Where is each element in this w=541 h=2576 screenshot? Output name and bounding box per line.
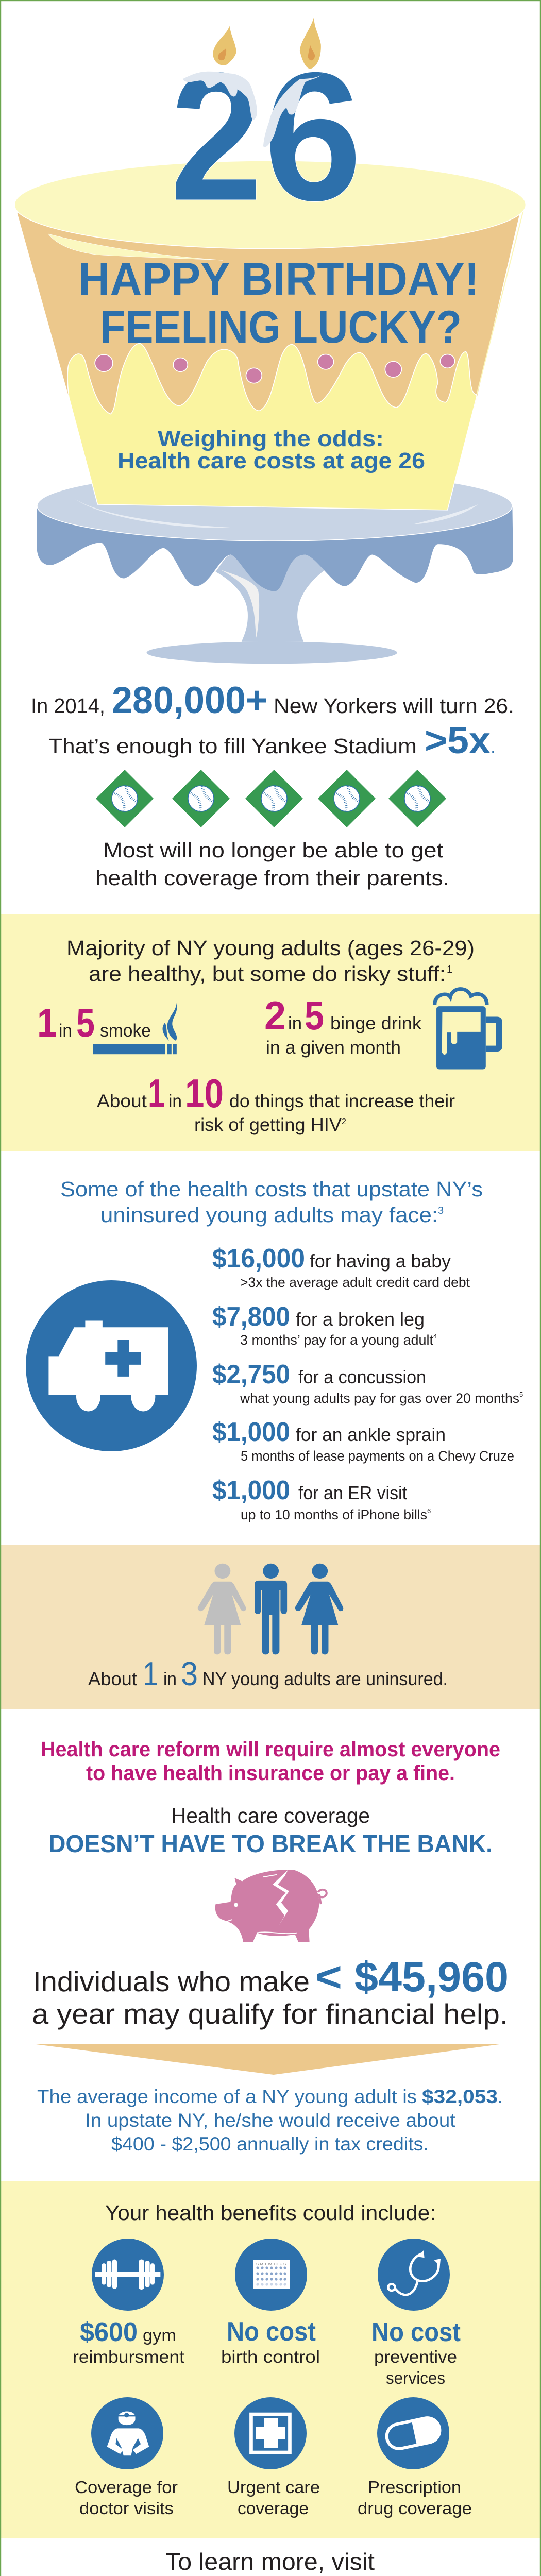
stat: 1 in 3 uninsured: 3 — [181, 1655, 198, 1692]
text: 280,000 New Yorkers — [31, 680, 514, 721]
icing — [67, 344, 477, 510]
benefit: doctor visits: doctor visits — [79, 2499, 174, 2518]
heading: risky stuff: Majority of NY young adults (ages 26-29) — [66, 936, 475, 960]
heading: health costs: 3 — [438, 1205, 444, 1216]
cake body — [17, 213, 519, 510]
title — [78, 253, 479, 352]
benefit: doctor visits — [75, 2478, 178, 2518]
cost: broken leg: 4 — [433, 1332, 437, 1340]
benefit: prescription drugs: Prescription — [368, 2478, 461, 2497]
heading: risky stuff: are healthy, but some do risky stuff: — [89, 962, 446, 986]
heading: health costs: uninsured young adults may face: — [100, 1203, 438, 1227]
cost: baby: for having a baby — [310, 1250, 451, 1272]
stat: 1 in 3 uninsured: in — [163, 1668, 177, 1689]
heading: risky stuff: 1 — [447, 964, 452, 975]
icon: stethoscope — [378, 2239, 450, 2311]
icon: urgent care cross — [234, 2397, 307, 2469]
stat: 2 in 5 binge drink: in — [288, 1013, 302, 1033]
cost: ankle sprain — [212, 1417, 514, 1464]
section: health costs — [26, 1177, 523, 1522]
icon: doctor — [91, 2397, 163, 2469]
stat: 2 in 5 binge drink: binge drink — [330, 1013, 422, 1033]
benefit: urgent care: Urgent care — [227, 2478, 320, 2497]
text: fill Yankee Stadium: . — [491, 734, 496, 758]
text: fill Yankee Stadium: That’s enough to fill Yankee Stadium — [48, 734, 417, 758]
callout: reform requirement: to have health insurance or pay a fine. — [86, 1761, 455, 1785]
text: fill Yankee Stadium — [48, 720, 496, 761]
icon: calendar: S M T W TH F S — [256, 2262, 286, 2266]
text: fill Yankee Stadium: >5x — [425, 720, 491, 761]
stat: 1 in 10 HIV risk: 1 — [148, 1071, 165, 1116]
callout: reform requirement — [41, 1737, 500, 1785]
benefit: birth control: No cost — [227, 2317, 316, 2347]
panel: risky behaviors — [0, 914, 541, 1151]
title: FEELING LUCKY? — [100, 301, 462, 352]
icon: broken piggy bank — [215, 1870, 327, 1942]
cake top — [14, 161, 526, 249]
heading: break the bank — [48, 1804, 493, 1858]
icon: pill — [377, 2397, 449, 2469]
heading: break the bank: Health care coverage — [171, 1804, 370, 1827]
section: health care reform — [32, 1737, 509, 2155]
stat: 1 in 3 uninsured — [88, 1655, 448, 1692]
panel: health benefits — [0, 2181, 541, 2538]
text: average income and tax credits — [37, 2086, 502, 2155]
benefit: preventive services: services — [386, 2368, 445, 2387]
arrow: down — [36, 2044, 499, 2075]
stat: 1 in 10 HIV risk: 10 — [185, 1071, 224, 1116]
cost: ER visit: $1,000 — [212, 1476, 290, 1505]
panel: uninsured — [0, 1545, 541, 1709]
cost: baby: $16,000 — [212, 1244, 305, 1274]
benefit: gym: gym — [143, 2326, 176, 2345]
benefit: gym: $600 — [80, 2317, 138, 2347]
icon: beer mug — [435, 989, 502, 1070]
cost: concussion: what young adults pay for gas over 20 months — [240, 1391, 519, 1406]
text: average income and tax credits: $400 - $2,500 annually in tax credits. — [111, 2133, 429, 2155]
text: income threshold: a year may qualify for financial help. — [32, 1998, 508, 2030]
cake decoration dots — [95, 354, 455, 383]
text: income threshold — [32, 1954, 509, 2030]
number 26 candles — [170, 35, 362, 239]
benefit: prescription drugs: drug coverage — [358, 2499, 472, 2518]
icon: ambulance — [26, 1280, 197, 1451]
stat: 1 in 3 uninsured: About — [88, 1668, 137, 1689]
benefit: preventive services: No cost — [371, 2317, 461, 2347]
cost: broken leg: for a broken leg — [296, 1309, 425, 1330]
stat: 1 in 5 smoke — [37, 1000, 151, 1045]
stat: 1 in 5 smoke: in — [59, 1021, 72, 1041]
stat: 1 in 5 smoke: 1 — [37, 1000, 57, 1045]
cost: baby — [212, 1244, 470, 1290]
cake stand — [37, 505, 513, 664]
heading: health costs — [60, 1177, 483, 1227]
stat: 1 in 5 smoke: smoke — [100, 1021, 151, 1041]
section: Yankee Stadium statistic — [31, 680, 514, 890]
stat: 1 in 10 HIV risk: 2 — [342, 1117, 346, 1126]
stat: 1 in 3 uninsured: NY young adults are uninsured. — [202, 1668, 448, 1689]
icons: baseball diamonds — [96, 770, 446, 827]
text: average income and tax credits: $32,053 — [422, 2086, 498, 2107]
stat: 1 in 10 HIV risk: About — [97, 1091, 147, 1111]
candle flames — [213, 17, 321, 69]
subtitle: Health care costs at age 26 — [117, 448, 425, 473]
cost: broken leg: 3 months’ pay for a young adult — [240, 1332, 433, 1348]
text: average income and tax credits: The average income of a NY young adult is — [37, 2086, 417, 2107]
cost: concussion: 5 — [519, 1391, 523, 1398]
text: no longer covered by parents: health coverage from their parents. — [95, 866, 449, 890]
cost: baby: >3x the average adult credit card debt — [240, 1275, 470, 1290]
benefit: doctor visits: Coverage for — [75, 2478, 178, 2497]
benefit: urgent care — [227, 2478, 320, 2518]
stat: 1 in 10 HIV risk: risk of getting HIV — [194, 1115, 342, 1135]
text: 280,000 New Yorkers: 280,000+ — [112, 680, 267, 721]
benefit: prescription drugs — [358, 2478, 472, 2518]
heading: benefits: Your health benefits could include: — [105, 2201, 436, 2225]
cost: broken leg — [212, 1302, 437, 1348]
stat: 2 in 5 binge drink: 5 — [305, 993, 324, 1038]
benefit: preventive services — [371, 2317, 461, 2387]
text: income threshold: $45,960 — [354, 1954, 509, 2001]
cost: broken leg: $7,800 — [212, 1302, 290, 1332]
subtitle — [117, 426, 425, 473]
cost: ankle sprain: 5 months of lease payments on a Chevy Cruze — [241, 1448, 514, 1464]
benefit: birth control: birth control — [221, 2347, 320, 2366]
icon: calendar — [235, 2239, 307, 2311]
stat: 1 in 3 uninsured: 1 — [143, 1655, 158, 1692]
text: 280,000 New Yorkers: New Yorkers will turn 26. — [274, 694, 514, 718]
heading: health costs: Some of the health costs that upstate NY’s — [60, 1177, 483, 1201]
cost: ankle sprain: $1,000 — [212, 1417, 290, 1447]
text: income threshold: < — [315, 1954, 342, 2001]
stat: 2 in 5 binge drink: 2 — [264, 993, 286, 1038]
subtitle: Weighing the odds: — [158, 426, 384, 451]
benefit: gym: reimbursment — [73, 2347, 184, 2366]
benefit: preventive services: preventive — [374, 2347, 457, 2366]
cost: concussion: for a concussion — [298, 1366, 426, 1387]
cost: concussion: $2,750 — [212, 1360, 290, 1389]
benefit: urgent care: coverage — [238, 2499, 309, 2518]
cost: ER visit: up to 10 months of iPhone bills — [241, 1507, 427, 1522]
benefit: birth control — [221, 2317, 320, 2366]
number 26 candles: 2 — [170, 35, 263, 239]
cost: ankle sprain: for an ankle sprain — [296, 1424, 446, 1445]
section: call to action: To learn more, visit — [165, 2548, 375, 2575]
icon: dumbbell — [92, 2239, 164, 2311]
icon: three people — [198, 1564, 343, 1654]
heading: risky stuff — [66, 936, 475, 986]
icon: cigarette — [93, 1003, 177, 1054]
stat: 2 in 5 binge drink: in a given month — [266, 1038, 401, 1058]
text: average income and tax credits: In upstate NY, he/she would receive about — [85, 2110, 456, 2131]
illustration: birthday cake on stand — [14, 17, 526, 664]
text: income threshold: Individuals who make — [33, 1965, 310, 1997]
candle wax drips — [183, 72, 323, 147]
benefit: gym — [73, 2317, 184, 2366]
text: average income and tax credits: . — [498, 2086, 502, 2107]
title: HAPPY BIRTHDAY! — [78, 253, 479, 304]
cost: ER visit: for an ER visit — [298, 1482, 407, 1503]
text: no longer covered by parents — [95, 838, 449, 890]
plate — [37, 471, 512, 541]
stat: 2 in 5 binge drink — [264, 993, 422, 1058]
stat: 1 in 10 HIV risk: do things that increase their — [229, 1091, 455, 1111]
cost: ER visit: 6 — [427, 1507, 431, 1515]
stat: 1 in 10 HIV risk — [97, 1071, 455, 1135]
stat: 1 in 10 HIV risk: in — [168, 1091, 182, 1111]
cost: ER visit — [212, 1476, 431, 1522]
heading: break the bank: DOESN’T HAVE TO BREAK THE BANK. — [48, 1831, 493, 1858]
text: 280,000 New Yorkers: In 2014, — [31, 694, 105, 718]
text: no longer covered by parents: Most will no longer be able to get — [103, 838, 444, 862]
callout: reform requirement: Health care reform will require almost everyone — [41, 1737, 500, 1761]
stat: 1 in 5 smoke: 5 — [76, 1000, 95, 1045]
number 26 candles: 6 — [263, 35, 362, 239]
cost: concussion — [212, 1360, 523, 1406]
